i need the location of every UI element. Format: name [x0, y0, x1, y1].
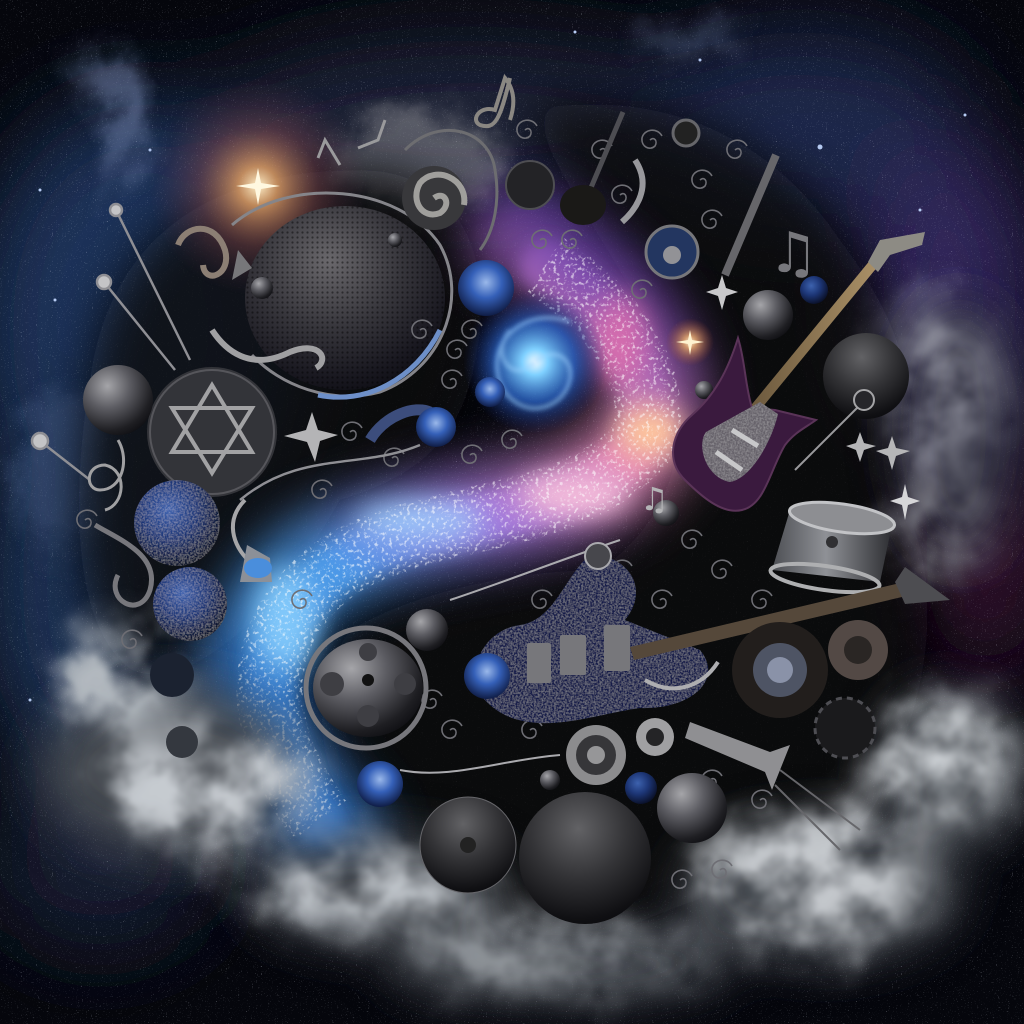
- trumpet: [685, 722, 860, 850]
- dark cluster backdrop: [79, 104, 928, 936]
- flowing curls: [400, 480, 669, 773]
- silver pins: [32, 204, 190, 480]
- upper right spheres: [653, 276, 909, 526]
- centre spheres: [357, 260, 514, 807]
- large mesh sphere: [178, 193, 452, 397]
- nebula wisps: [15, 25, 980, 550]
- top small instruments: [476, 78, 818, 310]
- metal spiral: [318, 120, 497, 250]
- star disc: [147, 367, 338, 497]
- clouds: [40, 300, 1020, 1000]
- drum: [769, 432, 920, 598]
- bass guitar: [476, 555, 950, 723]
- small curl ornaments: [77, 120, 772, 888]
- treble clef: [89, 440, 152, 605]
- electric guitar: [673, 232, 925, 511]
- spiral galaxy: [463, 290, 607, 434]
- speakers and records: [566, 620, 888, 785]
- left spheres: [83, 365, 227, 758]
- bell: [233, 500, 272, 582]
- handpan drum: [306, 628, 426, 748]
- bottom spheres: [420, 770, 727, 924]
- flowing curls: ♫: [640, 480, 669, 518]
- flare star top left: [148, 76, 368, 296]
- flare star right: [666, 318, 714, 366]
- top small instruments: ♫: [768, 221, 818, 286]
- galaxy stream: [252, 235, 684, 835]
